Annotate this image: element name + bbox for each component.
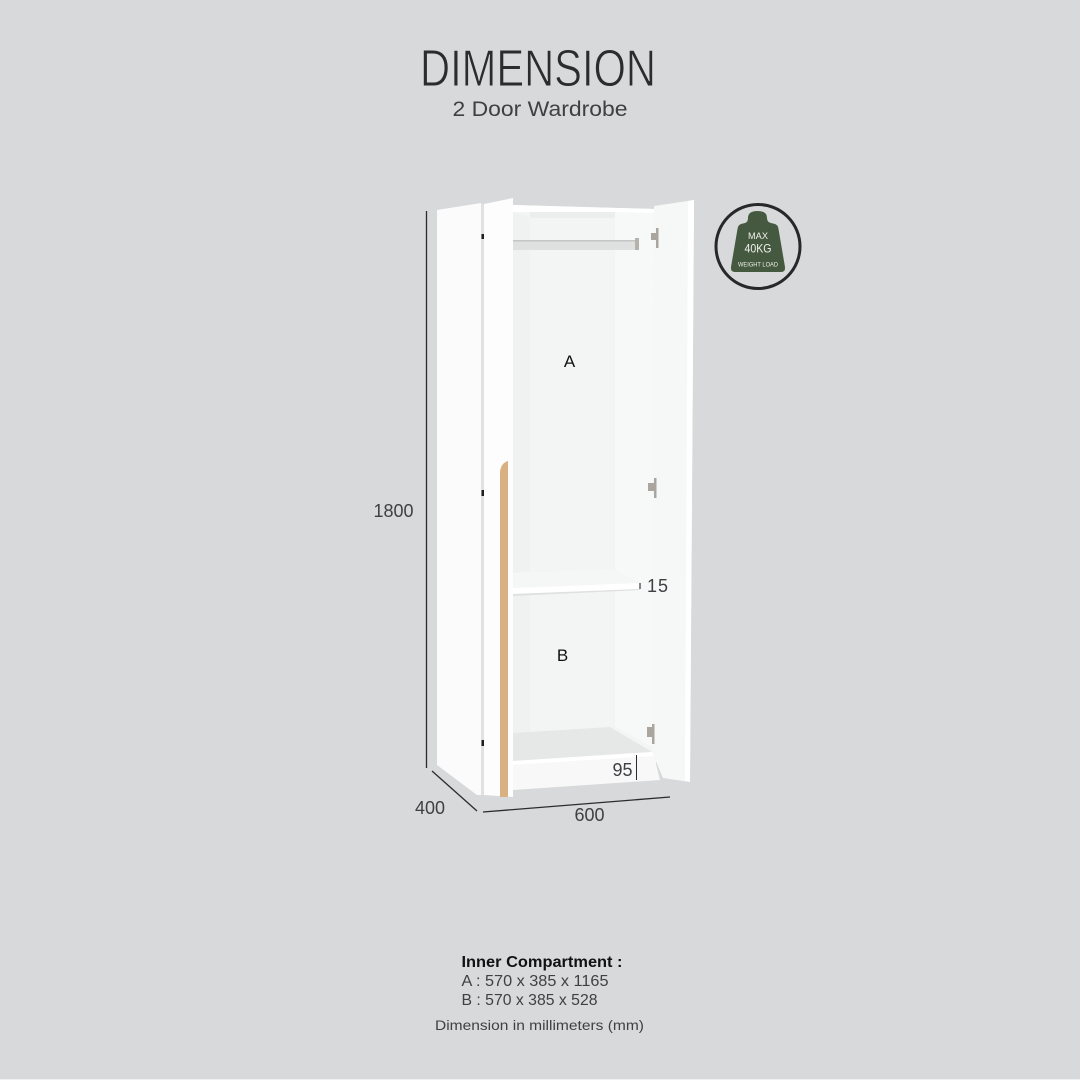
side hinge marks: [482, 234, 484, 746]
shelf thickness 15: 15: [647, 576, 669, 596]
inner compartment text block: [462, 954, 622, 1009]
hanging rail: [513, 238, 639, 250]
cabinet floor and plinth: [513, 727, 660, 790]
depth dimension 400: 400: [415, 798, 445, 818]
plinth height 95: 95: [612, 760, 633, 780]
cabinet interior: [513, 205, 656, 790]
hinges: [647, 228, 658, 744]
wardrobe side panel: [437, 203, 481, 795]
depth dimension 400: [415, 771, 477, 818]
right door: [652, 200, 694, 782]
shelf: [513, 569, 640, 596]
width dimension 600: [483, 797, 670, 825]
units note: Dimension in millimeters (mm): [435, 1018, 644, 1033]
inner compartment text block: B : 570 x 385 x 528: [462, 992, 598, 1009]
plinth height 95: [612, 755, 636, 780]
weight load badge: 40KG: [744, 242, 772, 256]
weight load badge: WEIGHT LOAD: [738, 262, 779, 268]
icon: weight: [731, 211, 785, 272]
weight load badge: [716, 204, 800, 288]
compartment label B: B: [557, 646, 568, 665]
left door: [484, 198, 513, 797]
inner compartment text block: A : 570 x 385 x 1165: [462, 973, 609, 990]
weight load badge: MAX: [748, 231, 769, 242]
inner compartment text block: Inner Compartment :: [462, 954, 622, 971]
compartment label A: A: [564, 352, 576, 371]
oak door edge: [500, 461, 508, 797]
height dimension 1800: 1800: [373, 501, 414, 521]
width dimension 600: 600: [574, 805, 605, 825]
wardrobe illustration: [437, 198, 694, 797]
subtitle: 2 Door Wardrobe: [452, 98, 628, 121]
title: DIMENSION: [420, 39, 656, 97]
